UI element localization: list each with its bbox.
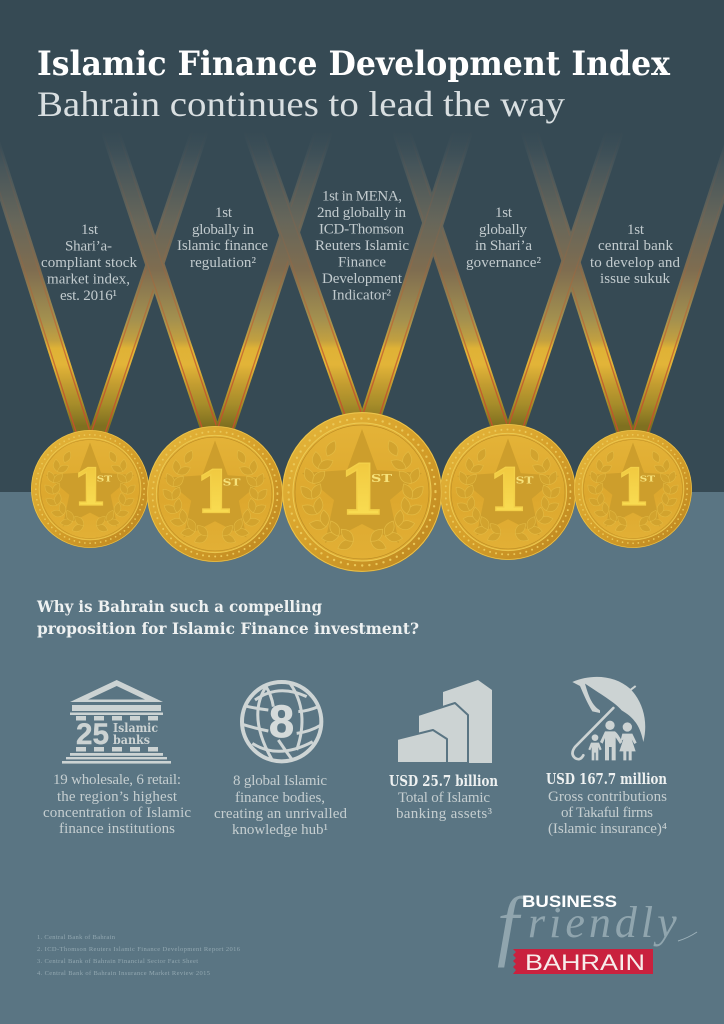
text: 25 banks description: 19 wholesale, 6 retail: <box>53 772 181 788</box>
text: takaful contributions: USD 167.7 million <box>546 770 667 788</box>
text: 25 banks description: concentration of Islamic <box>43 805 191 821</box>
ranking text 1: stock market index: Shari’a- <box>65 238 112 254</box>
background: lower slate band <box>0 492 724 1024</box>
text: 25 banks description: the region’s highest <box>57 789 178 805</box>
medal 3: centre, largest: 1 <box>338 451 386 531</box>
section heading: proposition for Islamic Finance investment? <box>37 619 419 638</box>
icon: globe with 8: 8 <box>269 696 294 747</box>
logo: Business Friendly Bahrain <box>497 881 697 975</box>
medal 4: ST <box>516 476 534 486</box>
ranking text 3: ICD-Thomson Reuters indicator: ICD-Thomson <box>319 222 404 238</box>
text: 25 banks description: finance institutions <box>59 821 175 837</box>
ranking text 3: ICD-Thomson Reuters indicator: Indicator² <box>332 288 392 304</box>
ranking text 3: ICD-Thomson Reuters indicator: 1st in MENA, <box>322 188 402 204</box>
ranking text 5: sukuk: central bank <box>598 238 674 254</box>
medal 5 <box>574 430 692 548</box>
icon: bank with 25 Islamic banks <box>62 680 171 764</box>
medal 2: 1 <box>195 459 235 527</box>
ranking text 3: ICD-Thomson Reuters indicator <box>315 188 409 304</box>
medal 1 <box>31 430 149 548</box>
logo: Business Friendly Bahrain: BAHRAIN <box>525 950 645 975</box>
footnotes: 3. Central Bank of Bahrain Financial Sector Fact Sheet <box>37 958 198 965</box>
text: global bodies description: finance bodies, <box>235 790 325 806</box>
icon: globe with 8 <box>242 682 321 761</box>
text: takaful contributions: (Islamic insurance)⁴ <box>548 821 667 837</box>
medal 5: ST <box>640 474 655 484</box>
icon: umbrella sheltering family <box>572 677 645 760</box>
text: banking assets: Total of Islamic <box>398 790 490 806</box>
icon: bank with 25 Islamic banks: banks <box>113 733 150 747</box>
text: banking assets: USD 25.7 billion <box>389 772 498 790</box>
ranking text 1: stock market index: 1st <box>81 222 99 238</box>
ranking text 2: regulation: globally in <box>192 222 254 238</box>
footnotes: 2. ICD-Thomson Reuters Islamic Finance Development Report 2016 <box>37 946 241 953</box>
logo: Business Friendly Bahrain: BUSINESS <box>522 893 617 911</box>
footnotes <box>37 934 241 977</box>
text: banking assets <box>389 772 498 822</box>
ranking text 3: ICD-Thomson Reuters indicator: 2nd globally in <box>317 205 406 221</box>
text: takaful contributions <box>546 770 667 837</box>
text: banking assets: banking assets³ <box>396 806 492 822</box>
medal 2 <box>147 426 283 562</box>
text: global bodies description: 8 global Islamic <box>233 773 327 789</box>
medal 4 <box>440 424 576 560</box>
ranking text 1: stock market index: market index, <box>47 272 130 288</box>
ranking text 4: governance <box>466 205 542 271</box>
ranking text 1: stock market index: est. 2016¹ <box>60 288 117 304</box>
ranking text 2: regulation: Islamic finance <box>177 238 268 254</box>
medal 2: ST <box>223 478 241 488</box>
ranking text 4: governance: globally <box>479 222 528 238</box>
medal 5: 1 <box>616 458 650 517</box>
medal 3: centre, largest: ST <box>371 472 393 485</box>
ranking text 1: stock market index: compliant stock <box>41 255 138 271</box>
section heading: Why is Bahrain such a compelling <box>36 597 322 616</box>
medal 3: centre, largest <box>282 412 442 572</box>
ranking text 5: sukuk <box>590 222 680 287</box>
text: 25 banks description <box>43 772 191 837</box>
ranking text 4: governance: governance² <box>466 255 542 271</box>
ranking text 2: regulation: 1st <box>215 205 233 221</box>
ranking text 3: ICD-Thomson Reuters indicator: Development <box>322 271 403 287</box>
ranking text 1: stock market index <box>41 222 138 304</box>
medal ribbons <box>0 130 724 440</box>
ranking text 5: sukuk: to develop and <box>590 255 680 271</box>
ranking text 5: sukuk: issue sukuk <box>600 271 670 287</box>
footnotes: 1. Central Bank of Bahrain <box>37 934 116 941</box>
icon: bank with 25 Islamic banks: 25 <box>76 718 109 751</box>
text: takaful contributions: of Takaful firms <box>561 805 653 821</box>
text: takaful contributions: Gross contributions <box>548 789 667 805</box>
ranking text 4: governance: in Shari’a <box>475 238 532 254</box>
medal 4: 1 <box>488 457 528 525</box>
ranking text 3: ICD-Thomson Reuters indicator: Finance <box>338 254 386 270</box>
medal 1: ST <box>97 474 112 484</box>
ranking text 5: sukuk: 1st <box>627 222 645 238</box>
ranking text 3: ICD-Thomson Reuters indicator: Reuters Islamic <box>315 238 409 254</box>
icon: rising buildings <box>397 680 492 763</box>
subtitle: Bahrain continues to lead the way <box>37 84 565 124</box>
medal 1: 1 <box>73 458 107 517</box>
text: global bodies description: knowledge hub¹ <box>232 822 328 838</box>
ranking text 2: regulation: regulation² <box>190 255 256 271</box>
logo: Business Friendly Bahrain: riendly <box>528 898 681 947</box>
text: global bodies description: creating an unrivalled <box>214 806 348 822</box>
title: Islamic Finance Development Index <box>37 44 671 84</box>
text: global bodies description <box>214 773 348 838</box>
section heading <box>36 597 419 638</box>
icon: bank with 25 Islamic banks: Islamic <box>113 721 158 735</box>
ranking text 4: governance: 1st <box>495 205 513 221</box>
logo: Business Friendly Bahrain: f <box>497 881 528 968</box>
ranking text 2: regulation <box>177 205 268 271</box>
background: upper dark band <box>0 0 724 492</box>
footnotes: 4. Central Bank of Bahrain Insurance Market Review 2015 <box>37 970 210 977</box>
